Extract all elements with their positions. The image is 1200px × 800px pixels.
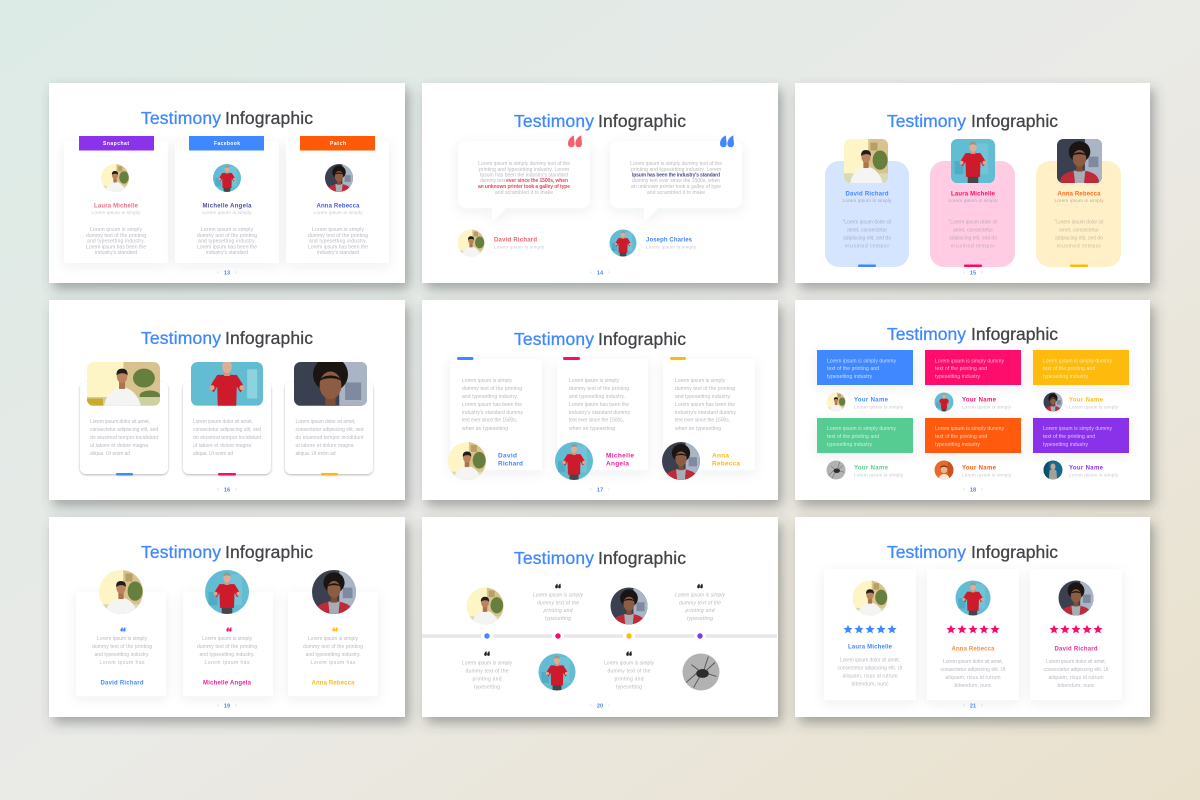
card: Laura Michelle: "Lorem ipsum dolor sit — [948, 220, 998, 226]
avatar: bottom four — [682, 654, 720, 690]
title: Testimony — [141, 328, 221, 348]
page number 21: ‹ — [963, 703, 965, 709]
page number 14: › — [608, 270, 610, 276]
testimony: blue: Lorem ipsum is simply — [854, 405, 904, 410]
card: Michelle Angela: dummy text of the printing — [197, 644, 257, 650]
card: David Richard: text ever since the 1500s, — [462, 418, 517, 424]
page number 14: ‹ — [590, 270, 592, 276]
page number 20 — [590, 703, 610, 710]
testimony: orange: typesetting industry — [935, 442, 980, 448]
card: David Richard: dummy text of the printing — [92, 644, 152, 650]
card: Anna Rebecca: Lorem ipsum has been the — [308, 244, 368, 250]
speech bubble: David Richard: Ipsum has been the industry's standard — [480, 172, 568, 178]
page number 16: ‹ — [217, 487, 219, 493]
person: Joseph Charles — [610, 230, 697, 256]
card: David Richard: David Richard — [846, 192, 889, 198]
speech bubble: Joseph Charles: dummy text ever since the 1500s, when — [632, 178, 720, 184]
page number 19: ‹ — [217, 703, 219, 709]
speech bubble: David Richard: printing and typesetting industry. Lorem — [479, 167, 569, 173]
star rating — [946, 625, 1000, 633]
card: photo one: Lorem ipsum dolor sit amet, — [90, 419, 150, 425]
testimony: orange — [925, 418, 1021, 480]
card: Michelle Angela: Michelle Angela — [203, 680, 252, 686]
card: photo three: Lorem ipsum dolor sit amet, — [296, 419, 356, 425]
card: Michelle Angela: text ever since the 1500s, — [569, 418, 624, 424]
card: Michelle Angela — [555, 357, 648, 480]
card: David Richard: Lorem ipsum dolor sit amet, — [1046, 659, 1106, 665]
avatar: bottom two — [538, 654, 576, 690]
page number 18 — [963, 487, 983, 494]
card: Anna Rebecca: Lorem ipsum is simply — [1054, 198, 1104, 203]
speech bubble: Joseph Charles: printing and typesetting industry. Lorem — [631, 167, 721, 173]
card: Laura Michelle: Laura Michelle — [848, 644, 893, 650]
page number 13: 13 — [224, 270, 230, 276]
testimony: bottom three: dummy text of the — [608, 668, 651, 674]
testimony: blue — [817, 350, 913, 412]
card: Anna Rebecca: and typesetting industry. — [309, 238, 367, 244]
card: Michelle Angela: dummy text of the printing — [197, 233, 257, 239]
card: Anna Rebecca: text ever since the 1500s, — [675, 418, 730, 424]
card: Laura Michelle: Snapchat — [103, 141, 129, 147]
card: David Richard: when an typesetting — [462, 426, 508, 432]
person: Joseph Charles: Lorem ipsum is simply — [646, 244, 697, 250]
panel: slide 21, star ratings — [795, 517, 1154, 723]
page number 20: ‹ — [590, 703, 592, 709]
page number 16 — [217, 487, 237, 494]
speech bubble: Joseph Charles: Lorem ipsum is simply dummy text of the — [630, 161, 722, 167]
speech bubble: David Richard: Lorem ipsum is simply dummy text of the — [478, 161, 570, 167]
panel: slide 15, pastel cards — [795, 83, 1154, 289]
card: Laura Michelle: aliquam, risus id rutrum — [842, 674, 898, 680]
card: Anna Rebecca: and typesetting industry. — [306, 652, 360, 658]
page number 17 — [590, 487, 610, 494]
card: David Richard — [448, 357, 542, 480]
title: Testimony — [141, 108, 221, 128]
title: Testimony — [514, 548, 594, 568]
card: Anna Rebecca: Anna Rebecca — [316, 204, 360, 210]
card: Anna Rebecca: dummy text of the printing — [308, 233, 368, 239]
page number 18: › — [981, 487, 983, 493]
card: Anna Rebecca: amet, consectetur — [1059, 228, 1099, 234]
card: Laura Michelle: Laura Michelle — [951, 192, 996, 198]
card: Michelle Angela: Lorem ipsum is simply — [202, 636, 252, 642]
speech bubble: Joseph Charles — [610, 135, 742, 222]
card: photo three: ut labore et dolore magna — [296, 443, 354, 449]
card: David Richard: Lorem ipsum has — [100, 660, 145, 666]
page number 20: 20 — [597, 704, 603, 710]
panel: slide 16, photo cards — [49, 300, 409, 506]
testimony: orange: Your Name — [962, 466, 997, 472]
testimony: bottom one: printing and — [472, 676, 502, 682]
card: Laura Michelle: bibendum, nunc — [852, 682, 889, 688]
card: Anna Rebecca: Lorem ipsum is simply — [308, 636, 358, 642]
card: Laura Michelle: Laura Michelle — [94, 204, 139, 210]
panel: slide 13, social testimony cards — [49, 83, 409, 289]
title — [887, 324, 1058, 344]
testimony: blue: Lorem ipsum is simply dummy — [827, 358, 896, 364]
testimony: green: typesetting industry — [827, 442, 872, 448]
title: Infographic — [225, 328, 313, 348]
testimony: green: Your Name — [854, 466, 889, 472]
testimony: pink: Lorem ipsum is simply — [962, 405, 1012, 410]
card: Anna Rebecca: "Lorem ipsum dolor sit — [1054, 220, 1104, 226]
card: Michelle Angela: and typesetting industry. — [198, 238, 256, 244]
card: David Richard: and typesetting industry. — [94, 652, 150, 658]
card: David Richard: aliquam, risus id rutrum — [1048, 675, 1104, 681]
testimony: blue: Your Name — [854, 398, 889, 404]
card: Anna Rebecca: dummy text of the printing — [675, 386, 735, 392]
testimony: purple: Lorem ipsum is simply — [1069, 472, 1119, 478]
title: Infographic — [971, 324, 1058, 344]
title: Testimony — [514, 111, 594, 131]
card: Laura Michelle — [930, 139, 1015, 267]
card: photo three: do eiusmod tempor incididunt — [296, 435, 364, 441]
card: David Richard: David Richard — [100, 680, 144, 686]
panel: slide 18, six coloured testimonies — [795, 300, 1154, 506]
card: photo two: Lorem ipsum dolor sit amet, — [193, 419, 253, 425]
card: David Richard: consectetur adipiscing elit. Ut — [1044, 667, 1109, 673]
card: Laura Michelle: Lorem ipsum has been the — [86, 244, 146, 250]
title — [514, 548, 686, 568]
testimony: bottom three: typesetting — [616, 684, 642, 690]
page number 17: › — [608, 487, 610, 493]
card: Anna Rebecca: Anna — [712, 452, 729, 460]
card: Anna Rebecca: Lorem ipsum has been the — [675, 402, 735, 408]
card: Anna Rebecca: and typesetting industry. — [675, 394, 731, 400]
person: David Richard — [458, 230, 545, 256]
testimony: purple — [1033, 418, 1129, 480]
page number 16: 16 — [224, 488, 230, 494]
card: Anna Rebecca: Anna Rebecca — [952, 646, 995, 652]
card: David Richard: "Lorem ipsum dolor sit — [842, 220, 892, 226]
testimony: green: text of the printing and — [827, 434, 879, 440]
card: Laura Michelle — [64, 136, 168, 263]
card: Anna Rebecca: industry's standard — [317, 250, 359, 256]
card: Anna Rebecca: when an typesetting — [675, 426, 721, 432]
title — [141, 108, 313, 128]
title: Testimony — [887, 324, 966, 344]
card: Anna Rebecca: Lorem ipsum has — [310, 660, 356, 666]
page number 14 — [590, 270, 610, 276]
testimony: purple: Your Name — [1069, 466, 1104, 472]
card: Michelle Angela: when an typesetting — [569, 426, 615, 432]
avatar: top one — [466, 588, 504, 624]
testimony: bottom one — [462, 651, 512, 690]
testimony: green: Lorem ipsum is simply dummy — [827, 426, 896, 432]
card: Laura Michelle: Lorem ipsum is simply — [90, 227, 142, 233]
speech bubble: David Richard: dummy text ever since the 1500s, when — [480, 178, 568, 184]
testimony: top four: Lorem ipsum is simply — [675, 592, 726, 598]
page number 18: ‹ — [963, 487, 965, 493]
card: Laura Michelle: Lorem ipsum is simply — [92, 210, 141, 215]
page number 17: ‹ — [590, 487, 592, 493]
testimony: orange: Lorem ipsum is simply — [962, 472, 1012, 478]
person: Joseph Charles: Joseph Charles — [646, 238, 693, 244]
page number 14: 14 — [597, 270, 604, 276]
testimony: bottom three: Lorem ipsum is simply — [604, 660, 654, 666]
testimony: yellow: Your Name — [1069, 398, 1104, 404]
card: Laura Michelle: Lorem ipsum dolor sit amet, — [840, 658, 900, 664]
card: David Richard: Lorem ipsum is simply — [842, 198, 892, 203]
card: photo one: aliqua. Ut enim ad — [90, 451, 130, 457]
card: David Richard: eiusmod tempor — [845, 244, 889, 250]
card: David Richard: Lorem ipsum is simply — [462, 378, 512, 384]
testimony: top four — [675, 584, 726, 622]
card: Laura Michelle: Lorem ipsum is simply — [948, 198, 998, 203]
card: photo two: ut labore et dolore magna — [193, 443, 251, 449]
card: Anna Rebecca — [662, 357, 755, 480]
person: David Richard: David Richard — [494, 238, 537, 244]
page number 21: 21 — [970, 704, 976, 710]
card: Laura Michelle: eiusmod tempor — [951, 244, 995, 250]
card: Laura Michelle: dummy text of the printing — [86, 233, 146, 239]
card: Michelle Angela — [183, 570, 273, 696]
panel: slide 14, speech bubbles — [422, 83, 782, 289]
title: Infographic — [225, 108, 313, 128]
speech bubble: Joseph Charles: and scrambled it to make — [647, 190, 705, 196]
card: Laura Michelle: adipiscing elit, sed do — [949, 236, 997, 242]
card: David Richard — [825, 139, 909, 267]
card: David Richard: adipiscing elit, sed do — [843, 236, 891, 242]
title: Infographic — [225, 542, 313, 562]
testimony: orange: Lorem ipsum is simply dummy — [935, 426, 1004, 432]
card: Laura Michelle: and typesetting industry. — [87, 238, 145, 244]
card: Michelle Angela: industry's standard — [206, 250, 248, 256]
card: Anna Rebecca: Lorem ipsum is simply — [314, 210, 363, 215]
card: Laura Michelle: amet, consectetur — [953, 228, 993, 234]
title: Testimony — [887, 542, 966, 562]
testimony: top four: printing and — [684, 608, 715, 614]
title: Testimony — [141, 542, 221, 562]
testimony: top two: dummy text of the — [537, 600, 579, 606]
card: photo three: aliqua. Ut enim ad — [296, 451, 336, 457]
page number 21 — [963, 703, 983, 710]
person: David Richard: Lorem ipsum is simply — [494, 244, 545, 250]
card: photo two: consectetur adipiscing elit, sed — [193, 427, 261, 433]
title: Infographic — [598, 111, 686, 131]
card: Michelle Angela: Angela — [606, 460, 629, 468]
card: Anna Rebecca: Anna Rebecca — [312, 680, 355, 686]
timeline axis with dots — [422, 630, 777, 642]
card: David Richard: industry's standard dummy — [462, 410, 524, 416]
title — [141, 542, 313, 562]
card: David Richard — [76, 570, 166, 696]
testimony: yellow: text of the printing and — [1043, 366, 1095, 372]
card: Anna Rebecca: eiusmod tempor — [1057, 244, 1101, 250]
title — [514, 111, 686, 131]
testimony: orange: text of the printing and — [935, 434, 987, 440]
testimony: yellow: Lorem ipsum is simply — [1069, 405, 1119, 410]
card: Michelle Angela: Lorem ipsum has been the — [197, 244, 257, 250]
testimony: bottom three: printing and — [614, 676, 644, 682]
card: David Richard: amet, consectetur — [847, 228, 887, 234]
card: Laura Michelle — [824, 569, 916, 700]
testimony: top two — [533, 584, 584, 622]
page number 16: › — [235, 487, 237, 493]
testimony: yellow: typesetting industry — [1043, 374, 1088, 380]
card: Anna Rebecca: dummy text of the printing — [303, 644, 363, 650]
page number 18: 18 — [970, 488, 976, 494]
title — [141, 328, 313, 348]
card: Anna Rebecca: consectetur adipiscing elit. Ut — [940, 667, 1006, 673]
panel: slide 19, cards with large avatars — [49, 517, 409, 723]
card: David Richard: David — [498, 452, 517, 460]
card: Anna Rebecca: industry's standard dummy — [675, 410, 736, 416]
card: Michelle Angela: Lorem ipsum has — [204, 660, 250, 666]
page number 19: › — [235, 703, 237, 709]
card: Michelle Angela — [175, 136, 279, 263]
card: Michelle Angela: and typesetting industry. — [569, 394, 625, 400]
speech bubble: David Richard: and scrambled it to make — [495, 190, 553, 196]
page number 15 — [963, 270, 983, 276]
testimony: top two: printing and — [542, 608, 573, 614]
card: photo two — [183, 360, 271, 476]
card: Michelle Angela: Lorem ipsum is simply — [569, 378, 620, 384]
title: Infographic — [971, 542, 1058, 562]
speech bubble: Joseph Charles: Ipsum has been the industry's standard — [632, 172, 720, 178]
testimony: bottom one: dummy text of the — [466, 668, 509, 674]
testimony: top four: typesetting — [687, 616, 713, 622]
page number 20: › — [608, 703, 610, 709]
card: Anna Rebecca: Patch — [330, 141, 346, 147]
testimony: green: Lorem ipsum is simply — [854, 472, 904, 478]
speech bubble: David Richard — [458, 135, 590, 222]
page number 21: › — [981, 703, 983, 709]
card: David Richard: Lorem ipsum is simply — [97, 636, 148, 642]
title: Infographic — [971, 111, 1058, 131]
card: Anna Rebecca — [286, 136, 389, 263]
testimony: green — [817, 418, 913, 480]
card: Michelle Angela: Lorem ipsum is simply — [202, 210, 252, 215]
testimony: pink: text of the printing and — [935, 366, 987, 372]
card: Michelle Angela: dummy text of the printing — [569, 386, 629, 392]
card: photo three: consectetur adipiscing elit, sed — [296, 427, 364, 433]
testimony: blue: typesetting industry — [827, 374, 872, 380]
page number 15: ‹ — [963, 270, 965, 276]
card: Anna Rebecca — [288, 570, 378, 696]
testimony: blue: text of the printing and — [827, 366, 879, 372]
card: Anna Rebecca: adipiscing elit, sed do — [1055, 236, 1103, 242]
card: photo two: do eiusmod tempor incididunt — [193, 435, 262, 441]
card: Michelle Angela: Lorem ipsum is simply — [201, 227, 254, 233]
title: Testimony — [514, 329, 594, 349]
card: David Richard: dummy text of the printing — [462, 386, 522, 392]
testimony: pink: typesetting industry — [935, 374, 980, 380]
card: Michelle Angela: and typesetting industry. — [200, 652, 254, 658]
card: Michelle Angela: Michelle — [606, 452, 634, 460]
speech bubble: David Richard: an unknown printer took a galley of type — [478, 184, 570, 190]
card: Michelle Angela: Lorem ipsum has been the — [569, 402, 629, 408]
page number 19: 19 — [224, 704, 230, 710]
page number 15: 15 — [970, 270, 976, 276]
testimony: bottom three — [604, 651, 654, 690]
title: Infographic — [598, 329, 686, 349]
card: David Richard: bibendum, nunc — [1058, 683, 1095, 689]
card: photo one: do eiusmod tempor incididunt — [90, 435, 159, 441]
card: photo one: consectetur adipiscing elit, sed — [90, 427, 158, 433]
title — [887, 542, 1058, 562]
card: Anna Rebecca: Lorem ipsum is simply — [675, 378, 726, 384]
card: Anna Rebecca: Lorem ipsum dolor sit amet, — [943, 659, 1003, 665]
card: photo one — [80, 362, 168, 476]
panel: slide 17, quote cards with avatars — [422, 300, 782, 506]
card: photo one: ut labore et dolore magna — [90, 443, 148, 449]
page number 13: › — [235, 270, 237, 276]
testimony: pink — [925, 350, 1021, 412]
page number 15: › — [981, 270, 983, 276]
card: David Richard: David Richard — [1054, 646, 1098, 652]
card: Anna Rebecca — [1036, 139, 1121, 267]
testimony: purple: typesetting industry — [1043, 442, 1088, 448]
card: Michelle Angela: Facebook — [214, 141, 240, 147]
card: photo three — [285, 353, 373, 476]
testimony: bottom one: typesetting — [474, 684, 500, 690]
card: Anna Rebecca: Rebecca — [712, 460, 740, 468]
card: Laura Michelle: industry's standard — [95, 250, 137, 256]
testimony: purple: text of the printing and — [1043, 434, 1095, 440]
speech bubble: Joseph Charles: an unknown printer took a galley of type — [631, 184, 721, 190]
card: Michelle Angela: Michelle Angela — [202, 204, 252, 210]
page number 13: ‹ — [217, 270, 219, 276]
testimony: pink: Lorem ipsum is simply dummy — [935, 358, 1004, 364]
star rating — [843, 625, 897, 633]
title: Infographic — [598, 548, 686, 568]
testimony: top two: Lorem ipsum is simply — [533, 592, 584, 598]
page number 13 — [217, 270, 237, 276]
card: David Richard: and typesetting industry. — [462, 394, 518, 400]
testimony: yellow: Lorem ipsum is simply dummy — [1043, 358, 1112, 364]
card: Anna Rebecca — [927, 569, 1019, 700]
card: David Richard: Richard — [498, 460, 523, 468]
card: photo two: aliqua. Ut enim ad — [193, 451, 233, 457]
panel: slide 20, timeline — [422, 517, 782, 723]
card: Anna Rebecca: Anna Rebecca — [1058, 192, 1101, 198]
star rating — [1049, 625, 1103, 633]
title — [887, 111, 1058, 131]
testimony: bottom one: Lorem ipsum is simply — [462, 660, 512, 666]
card: David Richard — [1030, 569, 1122, 700]
testimony: purple: Lorem ipsum is simply dummy — [1043, 426, 1112, 432]
avatar: top three — [610, 588, 648, 624]
card: Michelle Angela: industry's standard dummy — [569, 410, 630, 416]
testimony: pink: Your Name — [962, 398, 997, 404]
page number 19 — [217, 703, 237, 710]
testimony: top four: dummy text of the — [679, 600, 721, 606]
title — [514, 329, 686, 349]
card: Anna Rebecca: bibendum, nunc — [954, 683, 992, 689]
card: Laura Michelle: consectetur adipiscing elit. Ut — [838, 666, 903, 672]
title: Testimony — [887, 111, 966, 131]
testimony: yellow — [1033, 350, 1129, 412]
card: Anna Rebecca: aliquam, risus id rutrum — [946, 675, 1000, 681]
card: Anna Rebecca: Lorem ipsum is simply — [312, 227, 364, 233]
page number 17: 17 — [597, 488, 603, 494]
card: David Richard: Lorem ipsum has been the — [462, 402, 522, 408]
testimony: top two: typesetting — [545, 616, 571, 622]
